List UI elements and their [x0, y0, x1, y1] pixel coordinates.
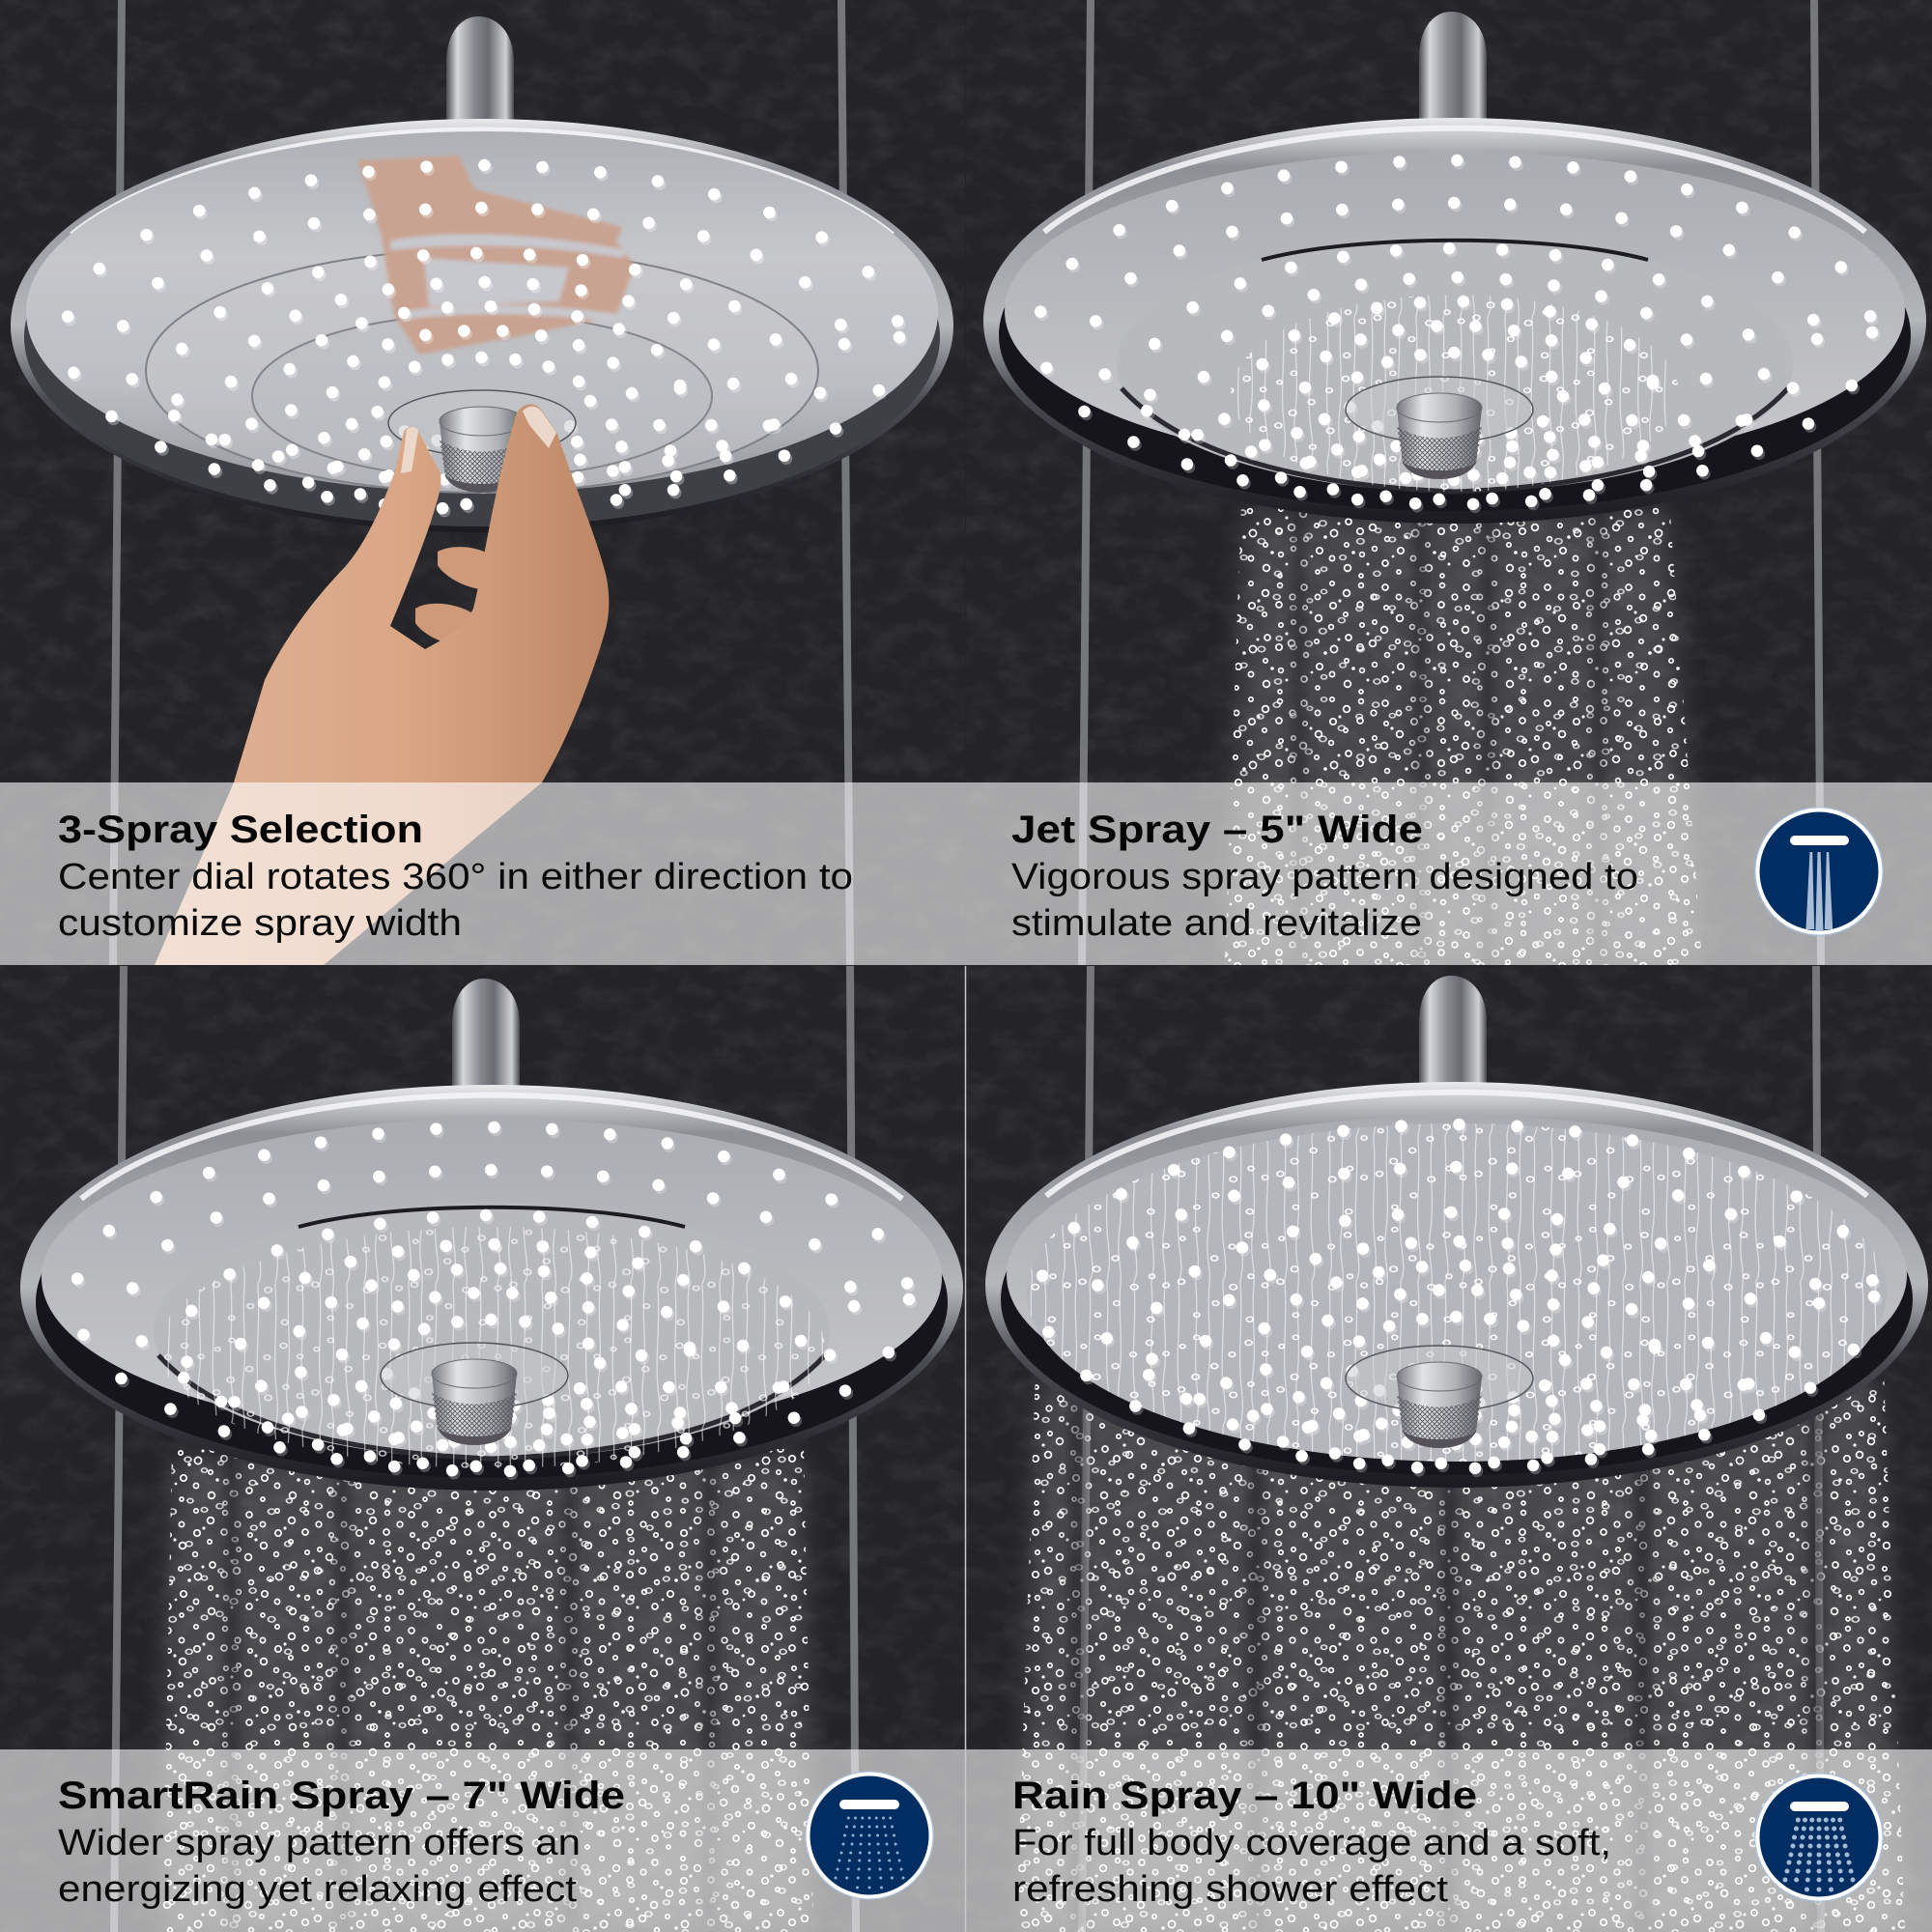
caption text: rain spray: Rain Spray – 10" Wide — [1012, 1775, 1477, 1817]
panel divider — [964, 966, 966, 1932]
caption text: rain spray: For full body coverage and a soft, — [1012, 1823, 1611, 1863]
panel: jet spray — [966, 0, 1932, 965]
shower head with rain nozzles — [985, 1082, 1928, 1488]
icon: smartrain spray — [805, 1771, 934, 1900]
caption text: 3-spray selection: customize spray width — [58, 903, 462, 944]
caption band: rain spray — [965, 1749, 1932, 1932]
caption text: smartrain spray: Wider spray pattern offers an — [58, 1823, 581, 1863]
icon: jet spray — [1754, 807, 1884, 936]
caption band: 3-spray selection — [0, 782, 965, 965]
caption text: 3-spray selection: Center dial rotates 360° in either direction to — [58, 857, 853, 897]
caption text: jet spray: stimulate and revitalize — [1011, 903, 1422, 944]
shower arm — [452, 979, 520, 1090]
caption band: jet spray — [965, 782, 1932, 965]
panel: rain spray — [966, 966, 1932, 1932]
hand reflection — [357, 156, 635, 355]
jet rain — [1225, 502, 1702, 965]
shower head with jet nozzles — [983, 118, 1926, 524]
caption text: rain spray — [1012, 1775, 1611, 1910]
caption text: jet spray: Vigorous spray pattern designed to — [1011, 857, 1638, 897]
caption text: smartrain spray: SmartRain Spray – 7" Wide — [58, 1775, 625, 1817]
icon: rain spray — [1754, 1773, 1884, 1902]
shower arm — [446, 16, 514, 128]
caption text: 3-spray selection: 3-Spray Selection — [58, 809, 423, 851]
caption text: smartrain spray — [58, 1775, 625, 1910]
caption text: rain spray: refreshing shower effect — [1012, 1869, 1448, 1910]
shower arm — [1419, 976, 1487, 1087]
shower arm — [1419, 12, 1487, 123]
caption text: jet spray: Jet Spray – 5" Wide — [1011, 809, 1423, 851]
caption text: jet spray — [1011, 809, 1638, 944]
rain spray water — [1016, 1372, 1905, 1932]
panel: 3-spray selection — [0, 0, 965, 965]
caption band: smartrain spray — [0, 1749, 965, 1932]
smartrain rain — [159, 1449, 813, 1932]
shower head chrome — [11, 119, 953, 532]
shower head with smartrain nozzles — [20, 1085, 963, 1491]
panel: smartrain spray — [0, 966, 965, 1932]
caption text: 3-spray selection — [58, 809, 853, 944]
caption text: smartrain spray: energizing yet relaxing effect — [58, 1869, 577, 1910]
hand — [155, 405, 609, 965]
